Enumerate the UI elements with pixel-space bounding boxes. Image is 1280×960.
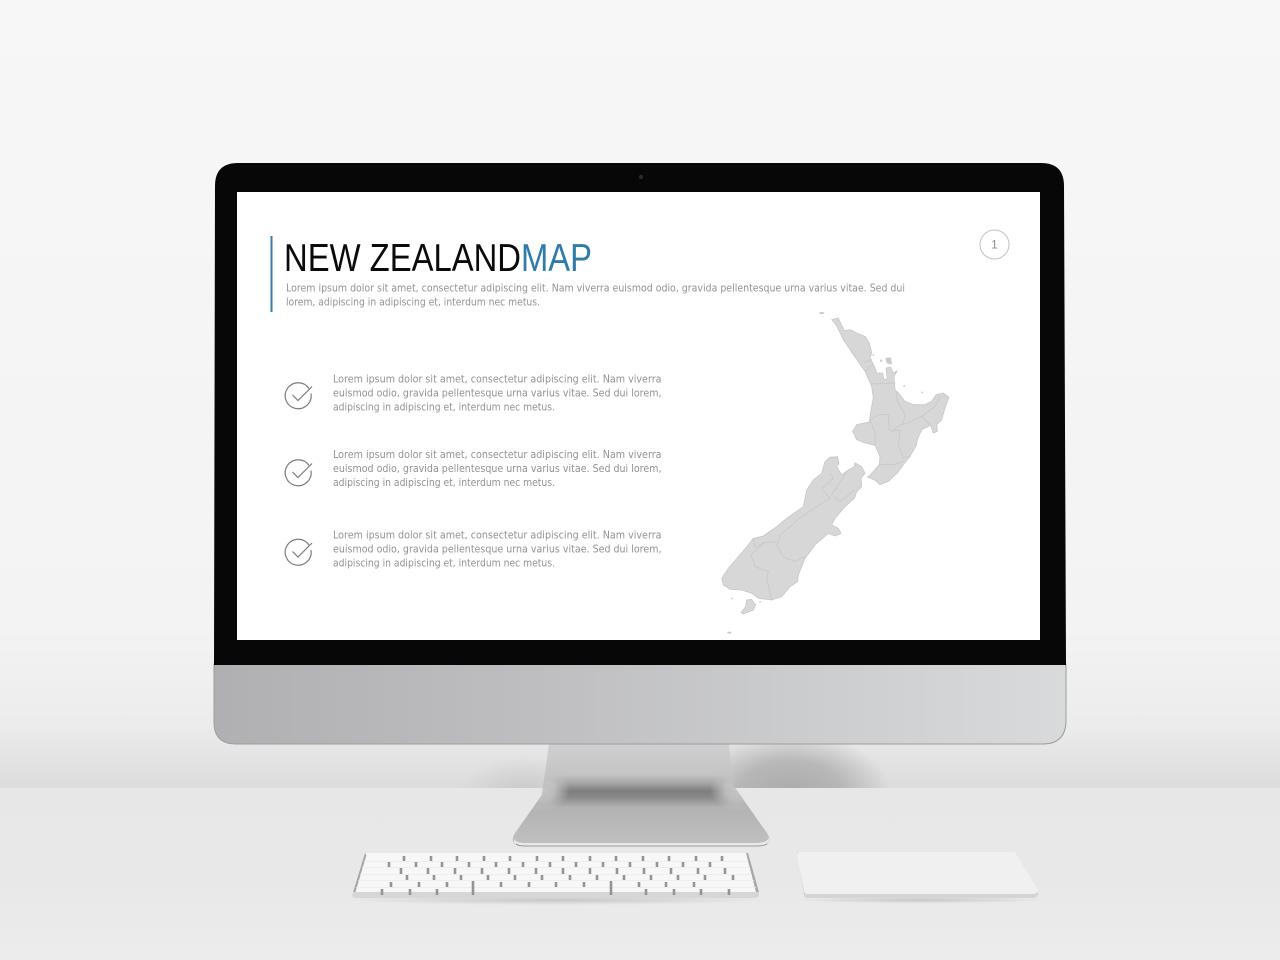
icon: check circle (285, 383, 312, 409)
background wall and desk (0, 725, 1280, 960)
text block: adipiscing in adipiscing et, interdum nec metus. (333, 477, 555, 489)
keyboard (346, 853, 766, 905)
title accent bar (270, 236, 272, 312)
text block: Lorem ipsum dolor sit amet, consectetur adipiscing elit. Nam viverra (333, 449, 662, 461)
text block: euismod odio, gravida pellentesque urna varius vitae. Sed dui lorem, (333, 388, 662, 400)
screen (237, 192, 1040, 640)
page number badge (980, 230, 1009, 259)
intro text: lorem, adipiscing in adipiscing et, interdum nec metus. (286, 296, 540, 308)
text block: Lorem ipsum dolor sit amet, consectetur adipiscing elit. Nam viverra (333, 374, 662, 386)
North Island (819, 312, 949, 485)
monitor stand (513, 744, 769, 846)
text block: euismod odio, gravida pellentesque urna varius vitae. Sed dui lorem, (333, 544, 662, 556)
title: NEW ZEALAND (284, 237, 521, 280)
text block: euismod odio, gravida pellentesque urna varius vitae. Sed dui lorem, (333, 463, 662, 475)
text block: adipiscing in adipiscing et, interdum nec metus. (333, 558, 555, 570)
intro text (286, 282, 905, 308)
keys (356, 856, 756, 895)
intro text: Lorem ipsum dolor sit amet, consectetur adipiscing elit. Nam viverra euismod odio, gravida pellentesque urna varius vitae. Sed dui (286, 282, 905, 294)
text block (333, 449, 662, 489)
text block: Lorem ipsum dolor sit amet, consectetur adipiscing elit. Nam viverra (333, 530, 662, 542)
Stewart Island (741, 599, 756, 614)
page number badge: 1 (991, 240, 998, 252)
webcam (639, 175, 643, 179)
text block (333, 530, 662, 570)
map: New Zealand (722, 312, 949, 634)
monitor (214, 163, 1066, 744)
list item 1 (285, 374, 662, 414)
text block: adipiscing in adipiscing et, interdum nec metus. (333, 402, 555, 414)
title accent word: MAP (521, 237, 592, 280)
monitor bezel (214, 163, 1066, 665)
list item 3 (285, 530, 662, 570)
list item 2 (285, 449, 662, 489)
icon: check circle (285, 539, 312, 565)
text block (333, 374, 662, 414)
trackpad (795, 852, 1045, 904)
South Island (722, 457, 869, 634)
monitor chin (214, 664, 1066, 744)
icon: check circle (285, 460, 312, 486)
